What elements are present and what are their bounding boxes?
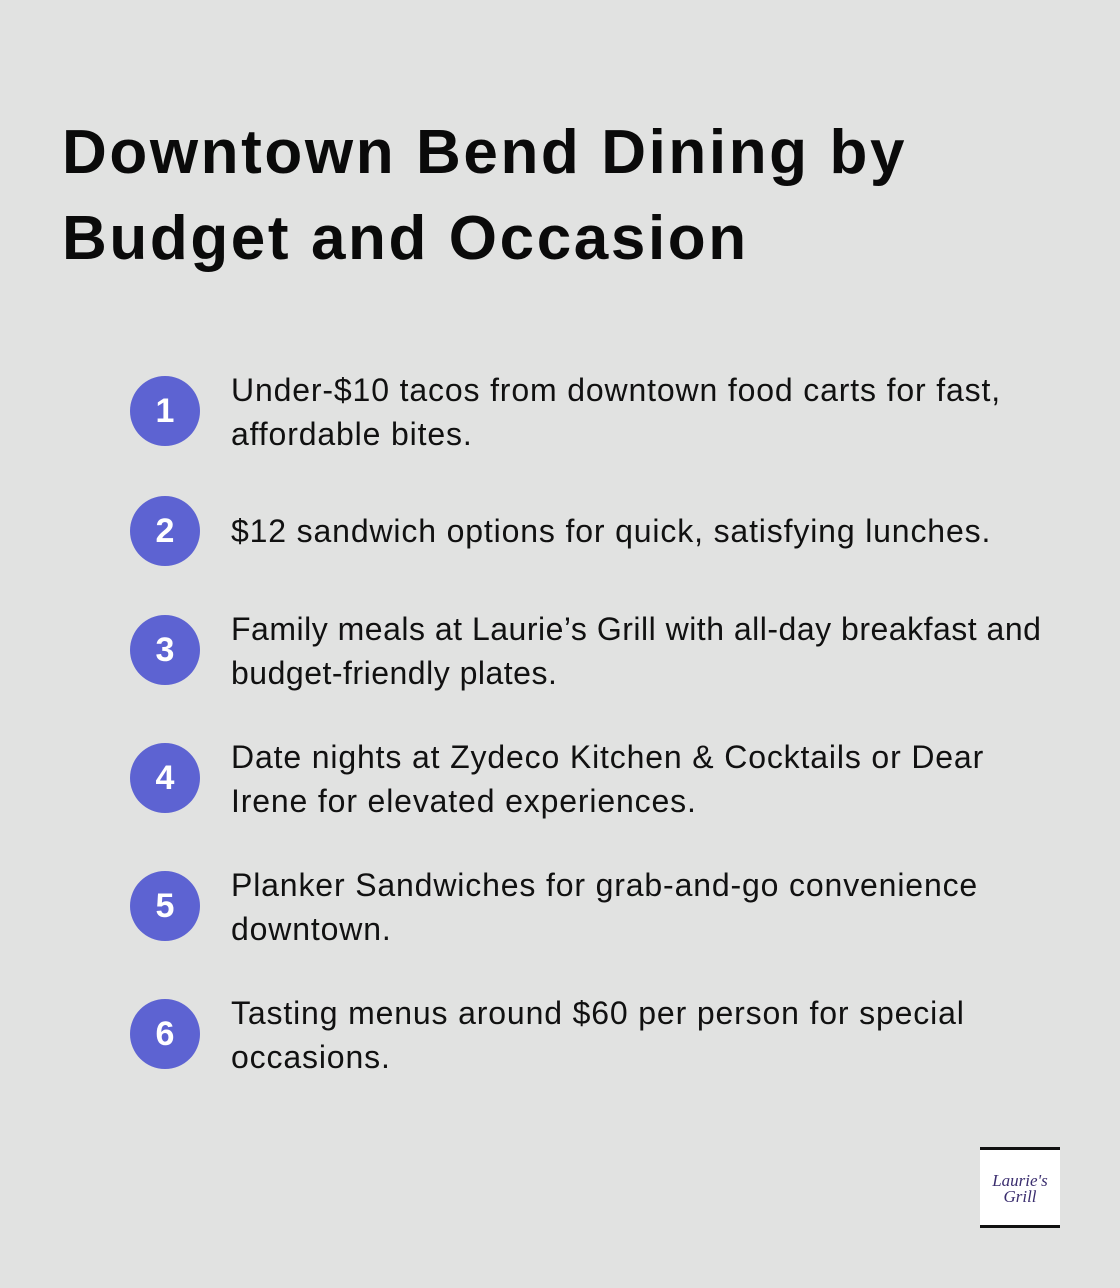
logo <box>980 1147 1060 1228</box>
badge 3: 3 <box>156 631 174 669</box>
badge 5 <box>130 871 200 941</box>
text 1: affordable bites. <box>231 416 473 452</box>
text 4: Date nights at Zydeco Kitchen & Cocktails or Dear <box>231 739 984 775</box>
badge 2 <box>130 496 200 566</box>
item 5 <box>130 867 978 947</box>
logo: Laurie's <box>992 1171 1048 1190</box>
title <box>62 118 907 273</box>
badge 1 <box>130 376 200 446</box>
badge 4: 4 <box>156 759 174 797</box>
text 3: budget-friendly plates. <box>231 655 557 691</box>
text 6 <box>231 995 965 1075</box>
text 5: downtown. <box>231 911 392 947</box>
text 4 <box>231 739 984 819</box>
item 6 <box>130 995 965 1075</box>
badge 4 <box>130 743 200 813</box>
item 1 <box>130 372 1001 452</box>
text 3: Family meals at Laurie’s Grill with all-day breakfast and <box>231 611 1041 647</box>
item 2 <box>130 496 991 566</box>
badge 2: 2 <box>156 512 174 550</box>
badge 6 <box>130 999 200 1069</box>
text 3 <box>231 611 1041 691</box>
text 6: occasions. <box>231 1039 391 1075</box>
item 4 <box>130 739 984 819</box>
text 4: Irene for elevated experiences. <box>231 783 697 819</box>
text 5: Planker Sandwiches for grab-and-go convenience <box>231 867 978 903</box>
text 6: Tasting menus around $60 per person for special <box>231 995 965 1031</box>
text 2: $12 sandwich options for quick, satisfying lunches. <box>231 513 991 549</box>
badge 3 <box>130 615 200 685</box>
text 1 <box>231 372 1001 452</box>
logo: Grill <box>1003 1187 1037 1206</box>
title: Downtown Bend Dining by <box>62 118 907 187</box>
text 1: Under-$10 tacos from downtown food carts for fast, <box>231 372 1001 408</box>
text 5 <box>231 867 978 947</box>
item 3 <box>130 611 1041 691</box>
badge 6: 6 <box>156 1015 174 1053</box>
title: Budget and Occasion <box>62 204 749 273</box>
badge 1: 1 <box>156 392 174 430</box>
badge 5: 5 <box>156 887 174 925</box>
